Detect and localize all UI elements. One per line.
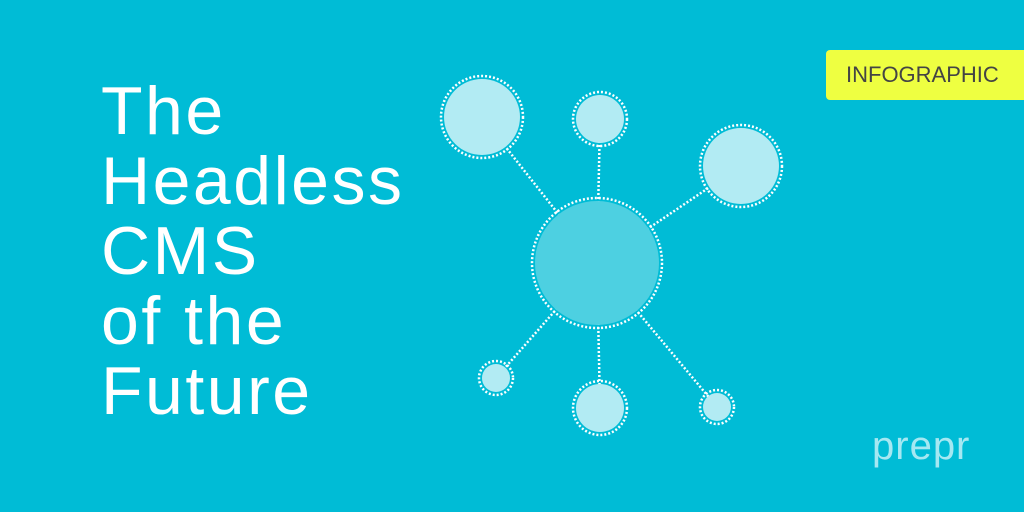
badge: infographic: INFOGRAPHIC: [846, 62, 999, 87]
title: of the: [101, 283, 286, 359]
badge: infographic: [826, 50, 1024, 100]
title: [101, 73, 404, 429]
logo: prepr: prepr: [872, 424, 970, 468]
title: Headless: [101, 143, 404, 219]
title: CMS: [101, 213, 260, 289]
title: Future: [101, 353, 313, 429]
title: The: [101, 73, 226, 149]
